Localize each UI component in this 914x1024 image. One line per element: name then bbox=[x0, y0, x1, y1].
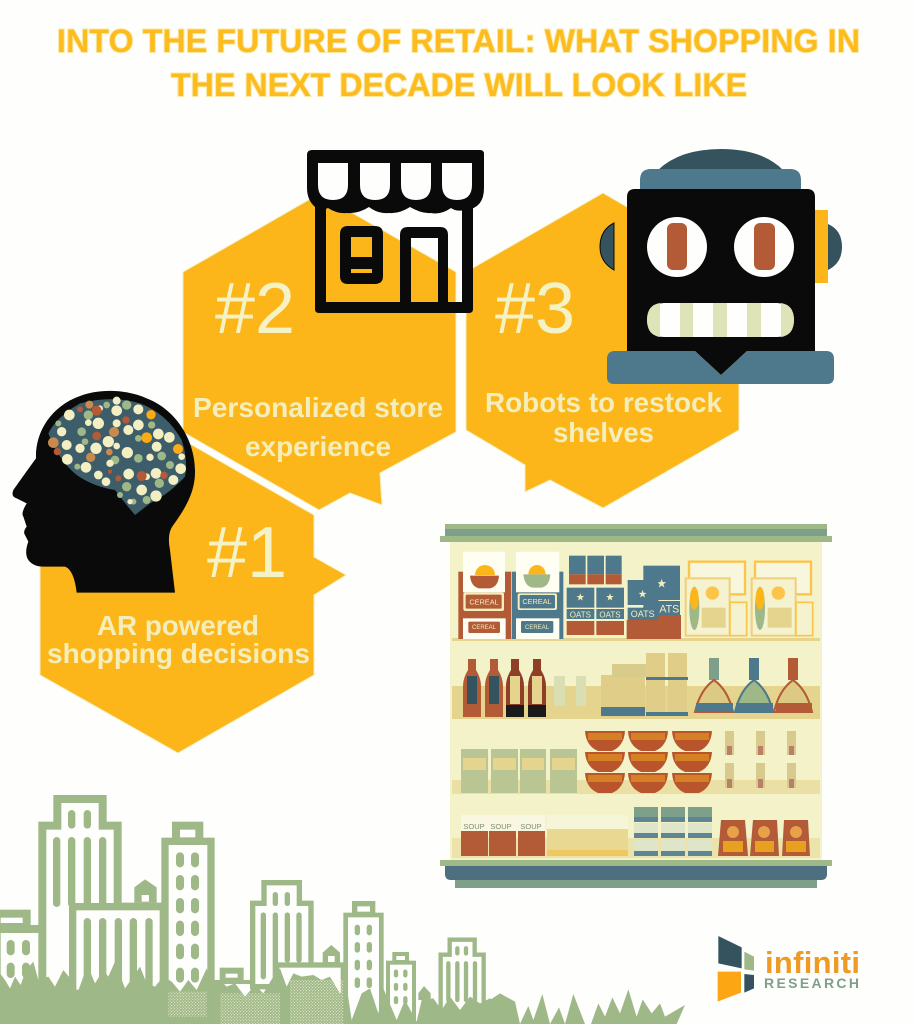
shelf row 2: sauces and dressings bbox=[463, 653, 812, 717]
large oats boxes bbox=[627, 566, 681, 639]
cereal box red: CEREAL bbox=[472, 625, 497, 631]
medium oats boxes: OATS bbox=[570, 610, 591, 619]
small oats boxes bbox=[569, 556, 622, 584]
cereal box red: CEREAL bbox=[469, 597, 499, 606]
illustration: city skyline bbox=[0, 799, 685, 1024]
robot face bbox=[627, 189, 815, 375]
soup cartons: SOUP bbox=[520, 822, 542, 831]
logo wordmark: infiniti bbox=[765, 945, 860, 980]
logo subtitle: RESEARCH bbox=[764, 975, 859, 991]
shelf top cap bbox=[440, 524, 832, 542]
illustration: supermarket shelf bbox=[440, 524, 832, 888]
label 1: AR powered bbox=[97, 610, 259, 641]
small clear bottles bbox=[554, 676, 586, 706]
medium oats boxes: ★ bbox=[576, 592, 585, 603]
label 3: Robots to restock bbox=[485, 387, 723, 418]
rooftop house small bbox=[323, 945, 340, 963]
panel: #2 personalized store experience bbox=[183, 194, 456, 510]
cereal box blue bbox=[512, 552, 563, 639]
brain blob bbox=[48, 397, 186, 515]
small house right bbox=[418, 986, 431, 1000]
tower F bbox=[441, 940, 484, 1013]
left small building windows bbox=[11, 944, 26, 974]
dressing bottles bbox=[695, 658, 812, 712]
head silhouette bbox=[13, 391, 195, 593]
medium oats boxes bbox=[567, 588, 624, 635]
middle low building bbox=[215, 971, 280, 1024]
logo mark bbox=[718, 936, 754, 1002]
lower block 2 bbox=[277, 965, 343, 1024]
title bbox=[57, 23, 860, 103]
panel: #1 AR powered shopping decisions bbox=[40, 437, 346, 753]
tower B bbox=[165, 826, 211, 998]
icon: robot head bbox=[600, 149, 842, 384]
label 2: Personalized store bbox=[193, 392, 443, 423]
panel: #1 AR powered shopping decisions: shopping decisions bbox=[47, 638, 310, 669]
left small building bbox=[0, 914, 72, 993]
robot eyes bbox=[647, 217, 794, 277]
shelf background bbox=[450, 538, 822, 860]
tall tower A bbox=[42, 799, 160, 993]
robot hat bbox=[640, 169, 801, 189]
icon: store front bbox=[307, 150, 484, 313]
lower block windows bbox=[87, 922, 149, 987]
soup cartons bbox=[461, 815, 545, 856]
panel: #3 robots to restock shelves bbox=[466, 193, 739, 508]
number 3: #3 bbox=[495, 269, 575, 349]
medium oats boxes: OATS bbox=[599, 610, 621, 619]
panel: #2 personalized store experience: experience bbox=[245, 431, 391, 462]
lower block bbox=[73, 907, 163, 993]
cereal box blue: CEREAL bbox=[522, 597, 552, 606]
shelf row 4: soup, tins and packets bbox=[461, 807, 810, 856]
hexagon 1 bbox=[40, 437, 346, 753]
hexagon 2 bbox=[183, 194, 456, 510]
tower C bbox=[253, 883, 311, 987]
tan shelf bases bbox=[452, 638, 820, 858]
hexagon 3 bbox=[466, 193, 739, 508]
shelf row 3: packets and bowls bbox=[461, 731, 796, 793]
robot collar bbox=[607, 351, 834, 384]
icon: human head with brain bbox=[13, 391, 195, 593]
medium oats boxes: ★ bbox=[606, 592, 615, 603]
tan cartons bbox=[547, 815, 628, 856]
number 1: #1 bbox=[207, 513, 287, 593]
sauce bottles bbox=[463, 659, 546, 717]
tower D bbox=[346, 904, 381, 1024]
shelf bottom base bbox=[440, 860, 832, 888]
blue tins bbox=[634, 807, 712, 856]
rust packets bbox=[718, 820, 810, 856]
soup cartons: SOUP bbox=[463, 822, 485, 831]
tower E bbox=[388, 954, 414, 1024]
grass right bbox=[480, 989, 685, 1024]
green packets bbox=[461, 749, 577, 793]
grass bbox=[0, 962, 500, 1024]
grain packets bbox=[686, 562, 813, 636]
logo: Infiniti Research bbox=[718, 936, 860, 1002]
large oats boxes: ★ bbox=[656, 577, 667, 591]
dithered overlay bbox=[168, 980, 343, 1024]
large oats boxes: ★ bbox=[638, 589, 648, 601]
large oats boxes: ATS bbox=[659, 603, 679, 615]
cereal box blue: CEREAL bbox=[525, 625, 550, 631]
stacked bowls bbox=[585, 731, 712, 793]
large oats boxes: OATS bbox=[631, 609, 655, 619]
robot ears bbox=[600, 210, 842, 283]
robot dome bbox=[658, 149, 783, 170]
tan boxes bbox=[601, 653, 688, 717]
tower A windows bbox=[57, 814, 103, 903]
panel: #3 robots to restock shelves: shelves bbox=[553, 417, 654, 448]
rooftop house bbox=[134, 879, 157, 903]
tall glasses bbox=[725, 731, 796, 788]
title: INTO THE FUTURE OF RETAIL: WHAT SHOPPING IN bbox=[57, 23, 860, 59]
number 2: #2 bbox=[215, 269, 295, 349]
cereal box red bbox=[458, 552, 511, 639]
shelf row 1: cereal and oats bbox=[458, 552, 813, 639]
title: THE NEXT DECADE WILL LOOK LIKE bbox=[171, 67, 747, 103]
robot teeth bbox=[647, 303, 794, 337]
soup cartons: SOUP bbox=[490, 822, 512, 831]
